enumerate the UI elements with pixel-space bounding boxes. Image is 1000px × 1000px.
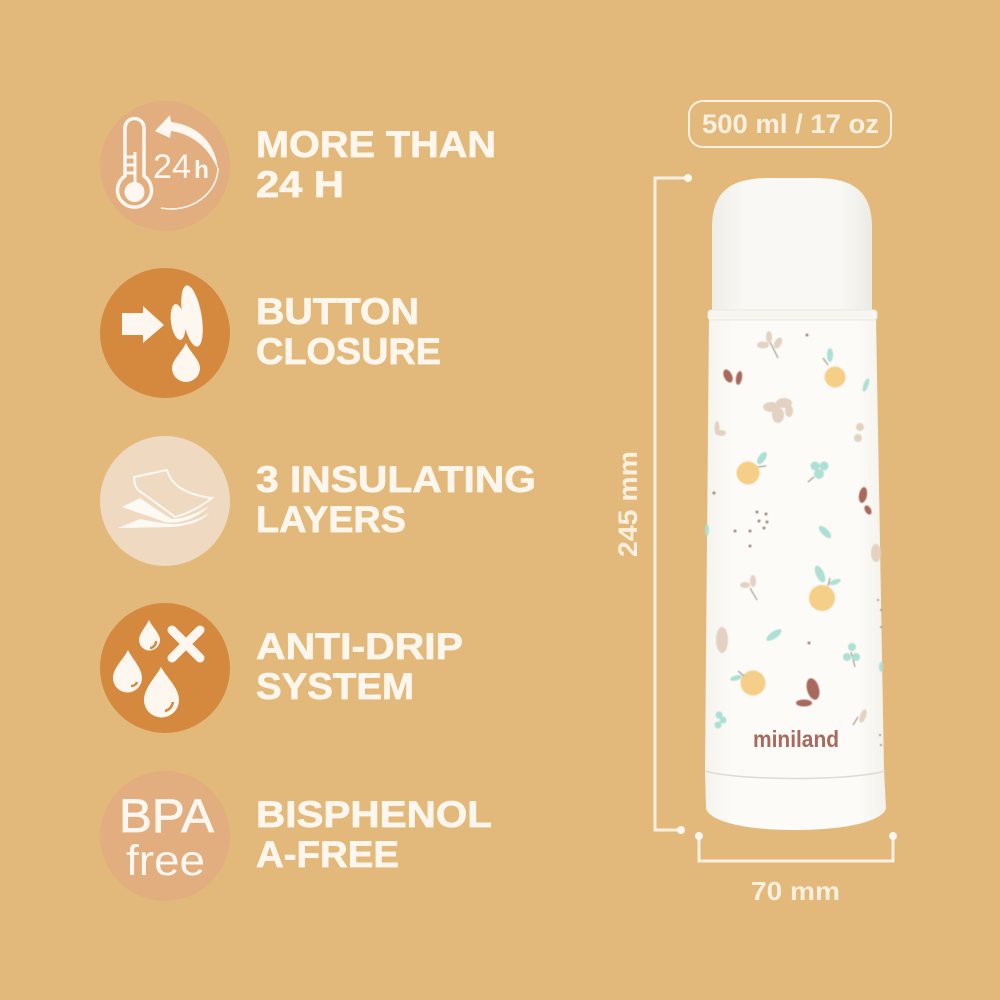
- heading: 24 H: [256, 164, 344, 205]
- pattern: oranges: [736, 366, 846, 696]
- heading: CLOSURE: [256, 331, 441, 372]
- height dimension: 245 mm: [613, 451, 643, 557]
- capacity label: [689, 101, 891, 147]
- width dimension: [695, 832, 897, 906]
- heading: MORE THAN: [256, 124, 496, 165]
- pattern: stems: [738, 340, 858, 725]
- icon: BPA free: [100, 771, 230, 901]
- heading: BISPHENOL: [256, 794, 492, 835]
- flask print pattern: [705, 331, 883, 746]
- pattern: beige leaves: [714, 331, 881, 724]
- icon: layers: [100, 436, 230, 566]
- icon: thermometer 24h: [100, 101, 230, 231]
- flask cap: [712, 178, 872, 310]
- icon: BPA free: BPA: [119, 789, 215, 842]
- flask: [705, 178, 886, 830]
- flask collar: [708, 310, 877, 320]
- icon: thermometer 24h: h: [194, 156, 209, 184]
- icon: thermometer 24h: 24: [153, 148, 191, 186]
- icon: button and drop: [100, 268, 230, 398]
- heading: BUTTON: [256, 291, 419, 332]
- height dimension: [613, 174, 692, 834]
- width dimension: 70 mm: [751, 876, 840, 906]
- icon: drops and cross: [100, 603, 230, 733]
- pattern: mint leaves: [705, 348, 883, 728]
- feature: more than 24 h: [100, 101, 496, 231]
- heading: A-FREE: [256, 834, 399, 875]
- heading: ANTI-DRIP: [256, 626, 463, 667]
- logo: miniland: miniland: [753, 726, 839, 752]
- pattern: dots: [712, 334, 882, 746]
- feature: button closure: [100, 268, 441, 398]
- icon: BPA free: free: [126, 837, 205, 885]
- heading: 3 INSULATING: [256, 459, 536, 500]
- feature: bisphenol a-free: [100, 771, 492, 901]
- feature: 3 insulating layers: [100, 436, 536, 566]
- pattern: brown leaves: [721, 368, 873, 706]
- capacity label: 500 ml / 17 oz: [702, 109, 879, 139]
- heading: SYSTEM: [256, 666, 414, 707]
- flask body and base: [705, 318, 886, 830]
- heading: LAYERS: [256, 499, 406, 540]
- feature: anti-drip system: [100, 603, 463, 733]
